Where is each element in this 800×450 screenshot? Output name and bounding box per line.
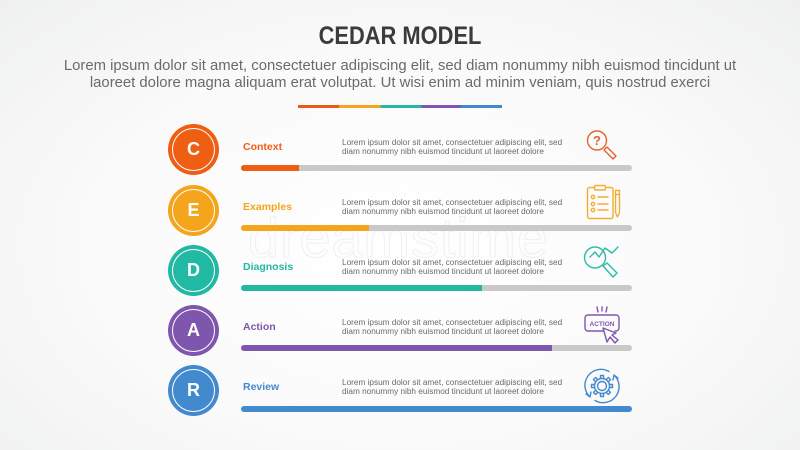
icon: clipboard checklist [586,184,620,220]
title divider [298,105,502,108]
row: Context [168,124,632,175]
description [342,258,562,276]
description: Lorem ipsum dolor sit amet, consectetuer adipiscing elit, sed [342,378,562,386]
icon: action button cursor [584,306,620,344]
progress bar [241,406,632,412]
description: Lorem ipsum dolor sit amet, consectetuer adipiscing elit, sed [342,138,562,146]
progress bar [241,285,632,291]
progress bar [241,225,632,231]
progress bar [241,345,632,351]
icon: chart magnifier [584,246,619,278]
circle E [168,185,219,236]
circle E: E [187,200,200,220]
description: Lorem ipsum dolor sit amet, consectetuer adipiscing elit, sed [342,198,562,206]
subtitle text [64,58,736,91]
circle A: A [187,320,200,340]
description: diam nonummy nibh euismod tincidunt ut laoreet dolore [342,327,544,336]
description: diam nonummy nibh euismod tincidunt ut laoreet dolore [342,387,544,396]
progress bar [241,165,632,171]
label Diagnosis: Diagnosis [243,261,293,273]
label Examples: Examples [243,201,292,213]
description [342,138,562,156]
description: diam nonummy nibh euismod tincidunt ut laoreet dolore [342,147,544,156]
label Context: Context [243,141,282,153]
row: Examples [168,184,632,236]
label Action: Action [243,321,276,333]
description [342,318,562,336]
description [342,198,562,216]
circle D [168,245,219,296]
icon: magnifier question [586,130,617,160]
title: CEDAR MODEL [319,22,481,50]
circle R: R [187,380,200,400]
circle C: C [187,139,200,159]
row: Action [168,305,632,356]
circle R [168,365,219,416]
circle C [168,124,219,175]
watermark: dreamstime [248,206,548,269]
icon: gear cycle [584,368,620,404]
description [342,378,562,396]
icon: action button cursor: ACTION [590,321,615,328]
description: diam nonummy nibh euismod tincidunt ut laoreet dolore [342,267,544,276]
circle A [168,305,219,356]
description: diam nonummy nibh euismod tincidunt ut laoreet dolore [342,207,544,216]
subtitle text: Lorem ipsum dolor sit amet, consectetuer adipiscing elit, sed diam nonummy nibh euismod tincidunt ut [64,58,736,74]
row: Diagnosis [168,245,632,296]
description: Lorem ipsum dolor sit amet, consectetuer adipiscing elit, sed [342,258,562,266]
subtitle text: laoreet dolore magna aliquam erat volutpat. Ut wisi enim ad minim veniam, quis nostrud exerci [90,75,710,91]
label Review: Review [243,381,279,393]
description: Lorem ipsum dolor sit amet, consectetuer adipiscing elit, sed [342,318,562,326]
icon: magnifier question: ? [593,133,601,148]
circle D: D [187,260,200,280]
row: Review [168,365,632,416]
